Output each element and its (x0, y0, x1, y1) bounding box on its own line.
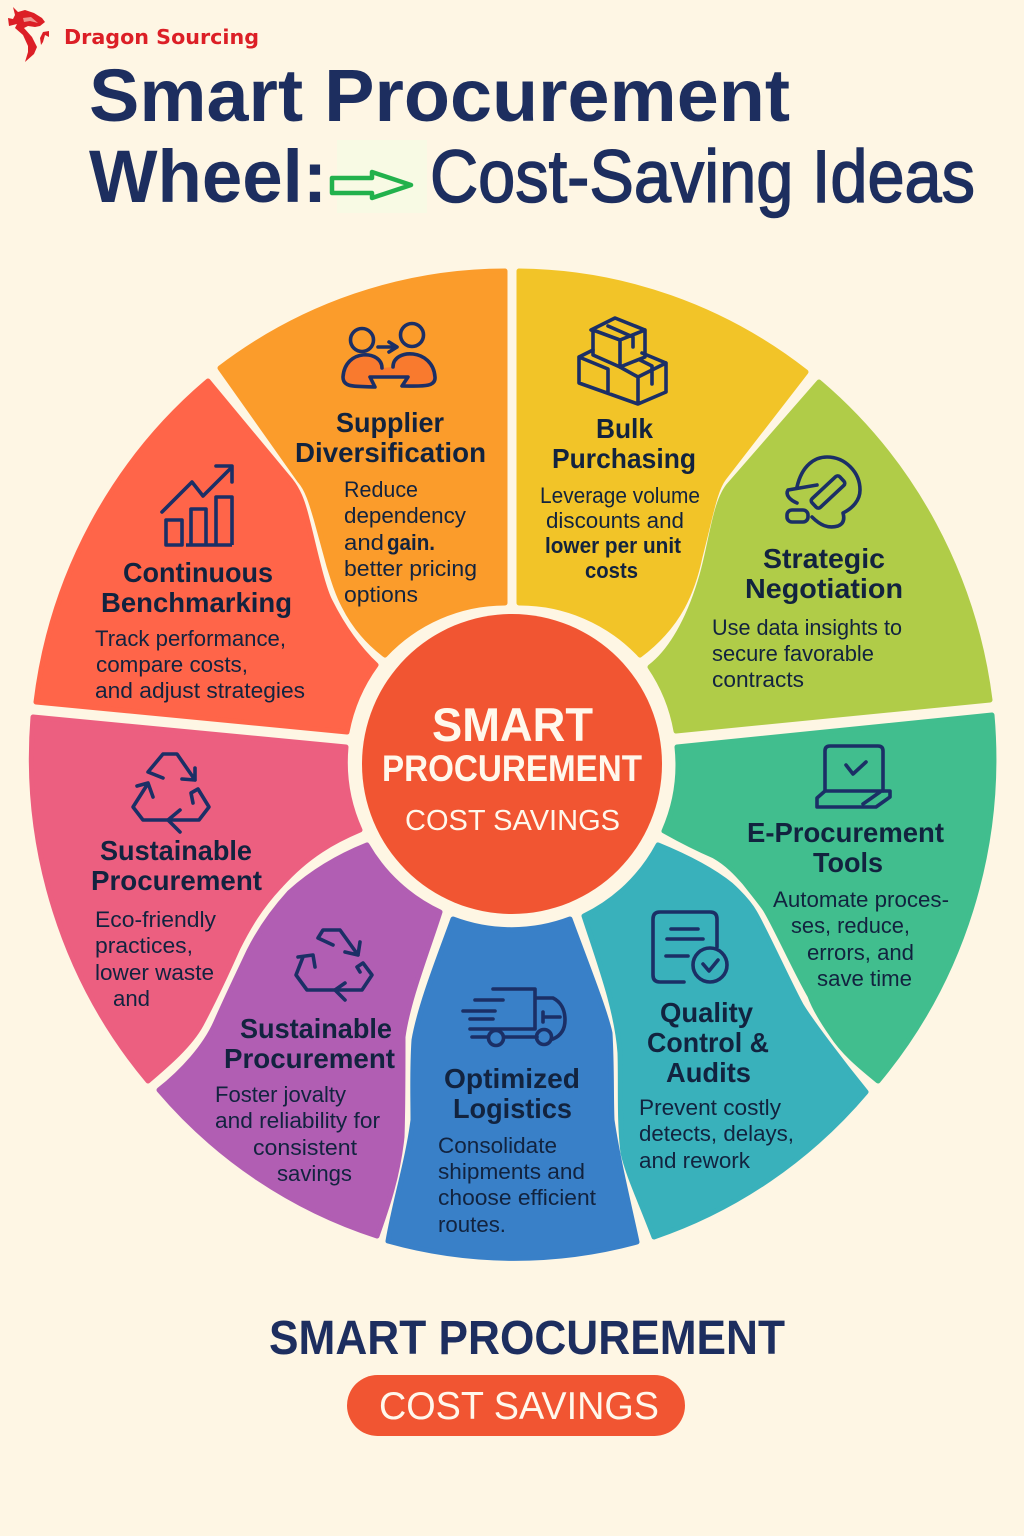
icon: two people exchanging (343, 324, 435, 387)
description: practices, (95, 933, 193, 958)
heading: Quality (660, 997, 753, 1028)
panel: Strategic Negotiation (650, 382, 990, 731)
footer heading: SMART PROCUREMENT (269, 1312, 785, 1365)
heading: Sustainable (240, 1013, 392, 1044)
icon: laptop with check (817, 746, 890, 807)
description: choose efficient (438, 1185, 597, 1210)
heading: Purchasing (552, 443, 696, 474)
description: contracts (712, 667, 804, 692)
heading: Diversification (295, 437, 486, 468)
footer pill: cost savings: COST SAVINGS (379, 1385, 659, 1428)
description (438, 1133, 597, 1237)
logo: Dragon Sourcing (8, 7, 259, 62)
description (344, 477, 477, 607)
description: ses, reduce, (791, 913, 910, 938)
heading: Logistics (453, 1093, 572, 1124)
heading: Sustainable (100, 835, 252, 866)
description (639, 1095, 794, 1173)
description: savings (277, 1161, 352, 1186)
title: Cost-Saving Ideas (430, 135, 975, 218)
description (95, 907, 217, 1011)
description: and (113, 986, 150, 1011)
heading: Optimized (444, 1063, 580, 1094)
description: errors, and (807, 940, 914, 965)
icon: pencil and speech head (787, 457, 860, 527)
description: better pricing (344, 556, 477, 581)
heading: Supplier (336, 407, 444, 438)
heading: Negotiation (745, 573, 903, 604)
center circle: SMART (432, 698, 593, 751)
arrow: green outline arrow in title (332, 140, 427, 213)
description: Leverage volume (540, 483, 700, 508)
panel: Quality Control and Audits (584, 845, 866, 1237)
icon: recycling arrows (133, 754, 209, 832)
panel: Sustainable Procurement (purple) (159, 845, 440, 1236)
heading: Bulk (596, 413, 653, 444)
icon: document with check (653, 912, 727, 982)
heading (444, 1063, 580, 1124)
description: secure favorable (712, 641, 874, 666)
description: routes. (438, 1212, 506, 1237)
center circle: PROCUREMENT (382, 748, 642, 789)
panel: Sustainable Procurement (pink) (31, 717, 360, 1081)
description: Prevent costly (639, 1095, 782, 1120)
heading: Procurement (91, 865, 262, 896)
icon: delivery truck (463, 989, 565, 1046)
panel: Supplier Diversification (220, 271, 505, 655)
heading: Audits (666, 1057, 751, 1088)
description: gain. (387, 530, 435, 555)
description (215, 1082, 381, 1186)
description: Foster jovalty (215, 1082, 347, 1107)
description: Automate proces- (773, 887, 949, 912)
description: shipments and (438, 1159, 585, 1184)
description: compare costs, (96, 652, 248, 677)
heading: Tools (813, 847, 883, 878)
heading (101, 557, 292, 618)
panel: E-Procurement Tools (664, 715, 994, 1081)
heading (745, 543, 903, 604)
footer pill: cost savings (347, 1375, 685, 1436)
heading: Control & (647, 1027, 769, 1058)
heading: Procurement (224, 1043, 395, 1074)
description: and reliability for (215, 1108, 381, 1133)
description: and adjust strategies (95, 678, 305, 703)
icon: rising bar chart (162, 466, 232, 545)
description: and (344, 530, 384, 555)
description: and rework (639, 1148, 751, 1173)
panel: Continuous Benchmarking (36, 381, 376, 732)
description: detects, delays, (639, 1121, 794, 1146)
heading (552, 413, 696, 474)
description: Reduce (344, 477, 418, 502)
heading (647, 997, 769, 1088)
title: Wheel: (89, 135, 327, 218)
description (540, 483, 700, 583)
description (95, 626, 305, 703)
description: Consolidate (438, 1133, 557, 1158)
title (89, 54, 975, 218)
description: dependency (344, 503, 467, 528)
heading: Continuous (123, 557, 273, 588)
description: save time (817, 966, 912, 991)
center circle (362, 614, 662, 914)
description: consistent (253, 1135, 358, 1160)
icon: stacked boxes (579, 318, 666, 404)
heading (747, 817, 944, 878)
heading (91, 835, 262, 896)
description: Eco-friendly (95, 907, 217, 932)
description (773, 887, 949, 991)
description: discounts and (546, 508, 684, 533)
description (712, 615, 902, 692)
panel: Bulk Purchasing (519, 271, 806, 655)
description: costs (585, 558, 638, 583)
description: options (344, 582, 418, 607)
heading: Benchmarking (101, 587, 292, 618)
center circle: COST SAVINGS (405, 805, 620, 837)
title: Smart Procurement (89, 54, 790, 137)
heading (295, 407, 486, 468)
description: Track performance, (95, 626, 286, 651)
heading (224, 1013, 395, 1074)
heading: Strategic (763, 543, 885, 574)
panel: Optimized Logistics (388, 919, 637, 1258)
heading: E-Procurement (747, 817, 944, 848)
description: Use data insights to (712, 615, 902, 640)
description: lower waste (95, 960, 214, 985)
icon: red dragon (8, 7, 49, 62)
description: lower per unit (545, 533, 682, 558)
icon: recycling arrows (296, 930, 372, 1000)
logo wordmark: Dragon Sourcing (64, 25, 259, 49)
